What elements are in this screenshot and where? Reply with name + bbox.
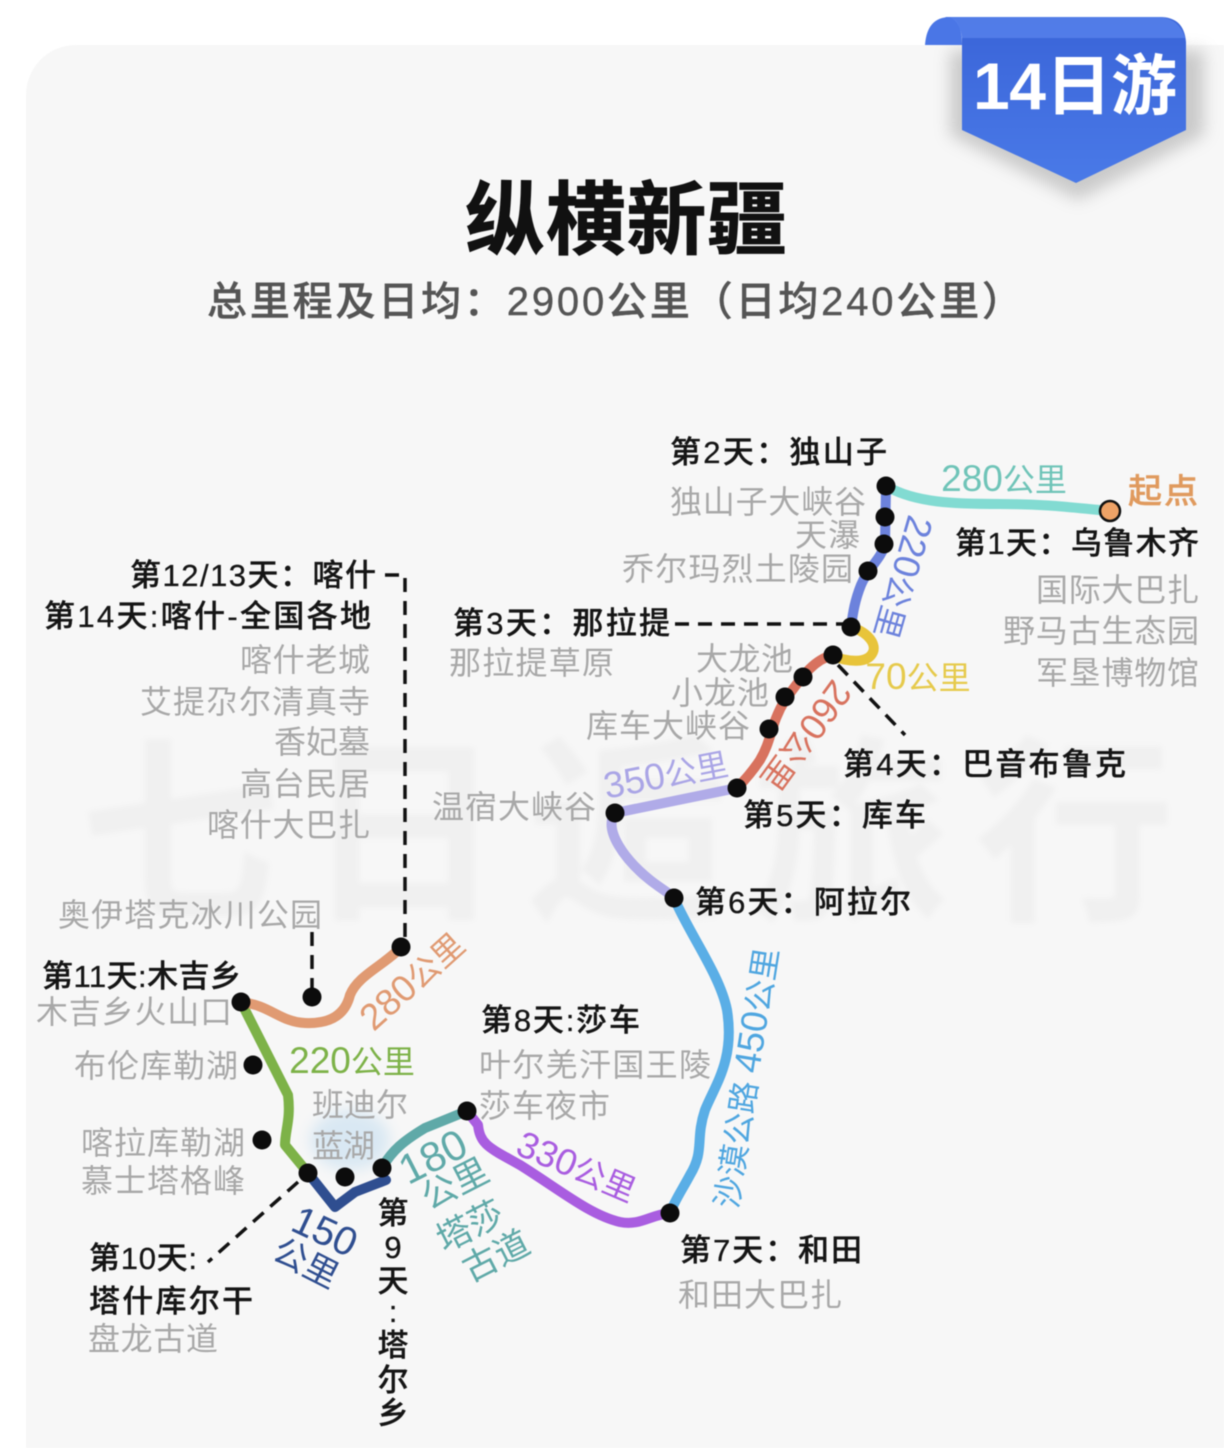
blue lake patch	[310, 1110, 390, 1170]
route: day 7 purple	[467, 1111, 670, 1223]
route: day 6 sky blue	[670, 898, 729, 1213]
day labels: 第11天:木吉乡	[42, 959, 241, 994]
attraction labels: 库车大峡谷	[586, 708, 750, 744]
start label: 起点	[1128, 473, 1198, 511]
day labels: :	[389, 1294, 397, 1329]
day labels: 尔	[378, 1363, 408, 1398]
attraction labels: 大龙池	[696, 641, 793, 677]
stop dots	[232, 476, 896, 1222]
distance labels: 280公里	[352, 924, 472, 1038]
route: day 9 navy	[308, 1173, 386, 1207]
distance labels: 260公里	[753, 673, 860, 799]
badge: 14日游	[925, 17, 1204, 200]
day labels	[42, 435, 1199, 1431]
watermark: 七日逅旅行	[80, 725, 1175, 948]
attraction labels: 小龙池	[671, 675, 769, 711]
day labels: 第7天：和田	[680, 1233, 862, 1268]
attraction labels: 温宿大峡谷	[432, 789, 596, 825]
distance labels	[267, 458, 1067, 1296]
day labels: 第8天:莎车	[481, 1003, 640, 1038]
attraction labels: 和田大巴扎	[678, 1277, 842, 1313]
distance labels: 古道	[456, 1223, 536, 1290]
distance labels: 220公里	[289, 1040, 415, 1081]
attraction labels: 班迪尔	[312, 1087, 408, 1123]
attraction labels: 叶尔羌汗国王陵	[479, 1047, 711, 1083]
attraction labels: 香妃墓	[274, 724, 370, 760]
start dot	[1100, 501, 1120, 521]
route: day 4 red	[737, 655, 833, 788]
attraction labels: 乔尔玛烈土陵园	[622, 551, 853, 587]
day labels: 第3天：那拉提	[453, 606, 670, 641]
attraction labels: 慕士塔格峰	[81, 1163, 245, 1199]
distance labels: 350公里	[600, 742, 731, 807]
day labels: 第2天：独山子	[670, 435, 887, 470]
distance labels: 280公里	[941, 458, 1067, 499]
attraction labels: 木吉乡火山口	[36, 994, 232, 1030]
attraction labels: 高台民居	[240, 766, 370, 802]
attraction labels: 国际大巴扎	[1036, 572, 1199, 608]
attraction labels: 独山子大峡谷	[670, 484, 866, 520]
day labels: 天	[378, 1264, 408, 1299]
day labels: 第10天:	[89, 1241, 197, 1276]
attraction labels: 那拉提草原	[449, 645, 614, 681]
attraction labels: 艾提尕尔清真寺	[140, 684, 370, 720]
day labels: 第14天:喀什-全国各地	[44, 599, 371, 634]
attraction labels: 军垦博物馆	[1036, 655, 1199, 691]
distance labels: 公里	[267, 1232, 344, 1296]
attraction labels: 蓝湖	[312, 1128, 375, 1164]
day labels: 第	[378, 1196, 408, 1231]
attraction labels: 喀什大巴扎	[207, 807, 370, 843]
route: day 10 green	[241, 1002, 308, 1173]
attraction labels: 布伦库勒湖	[74, 1048, 238, 1084]
day labels: 乡	[378, 1396, 408, 1431]
badge: 14日游: 14日游	[973, 49, 1177, 123]
title: 纵横新疆	[465, 176, 787, 265]
subtitle: 总里程及日均：2900公里（日均240公里）	[207, 280, 1022, 324]
distance labels: 330公里	[511, 1123, 642, 1210]
distance labels: 150	[285, 1198, 364, 1266]
distance labels: 70公里	[865, 656, 971, 697]
route: day 3 yellow	[833, 627, 874, 661]
day labels: 第6天：阿拉尔	[695, 885, 911, 920]
attraction labels: 奥伊塔克冰川公园	[58, 897, 322, 933]
attraction labels: 盘龙古道	[88, 1321, 218, 1357]
distance labels: 220公里	[866, 511, 940, 644]
distance labels: 塔莎	[430, 1193, 510, 1260]
distance labels: 沙漠公路 450公里	[705, 945, 786, 1211]
leader lines	[208, 575, 905, 1262]
route: day 11 orange	[241, 947, 401, 1023]
day labels: 塔	[378, 1328, 408, 1363]
route: day 5 periwinkle	[612, 788, 737, 898]
attraction labels: 天瀑	[795, 517, 860, 553]
day labels: 第5天：库车	[743, 798, 926, 833]
attraction labels	[36, 484, 1199, 1357]
distance labels: 180	[391, 1120, 475, 1193]
route: day 1 teal	[886, 486, 1110, 511]
day labels: 第1天：乌鲁木齐	[955, 526, 1199, 561]
day labels: 9	[384, 1230, 402, 1265]
day labels: 第12/13天：喀什	[130, 558, 376, 593]
attraction labels: 喀什老城	[240, 642, 370, 678]
attraction labels: 莎车夜市	[479, 1088, 610, 1124]
day labels: 第4天：巴音布鲁克	[843, 747, 1126, 782]
distance labels: 公里	[415, 1151, 495, 1218]
attraction labels: 野马古生态园	[1003, 613, 1199, 649]
route: day 2 blue	[851, 486, 886, 627]
route map	[36, 435, 1199, 1431]
attraction labels: 喀拉库勒湖	[81, 1125, 245, 1161]
route: day 8 teal	[382, 1111, 467, 1168]
day labels: 塔什库尔干	[89, 1284, 253, 1319]
